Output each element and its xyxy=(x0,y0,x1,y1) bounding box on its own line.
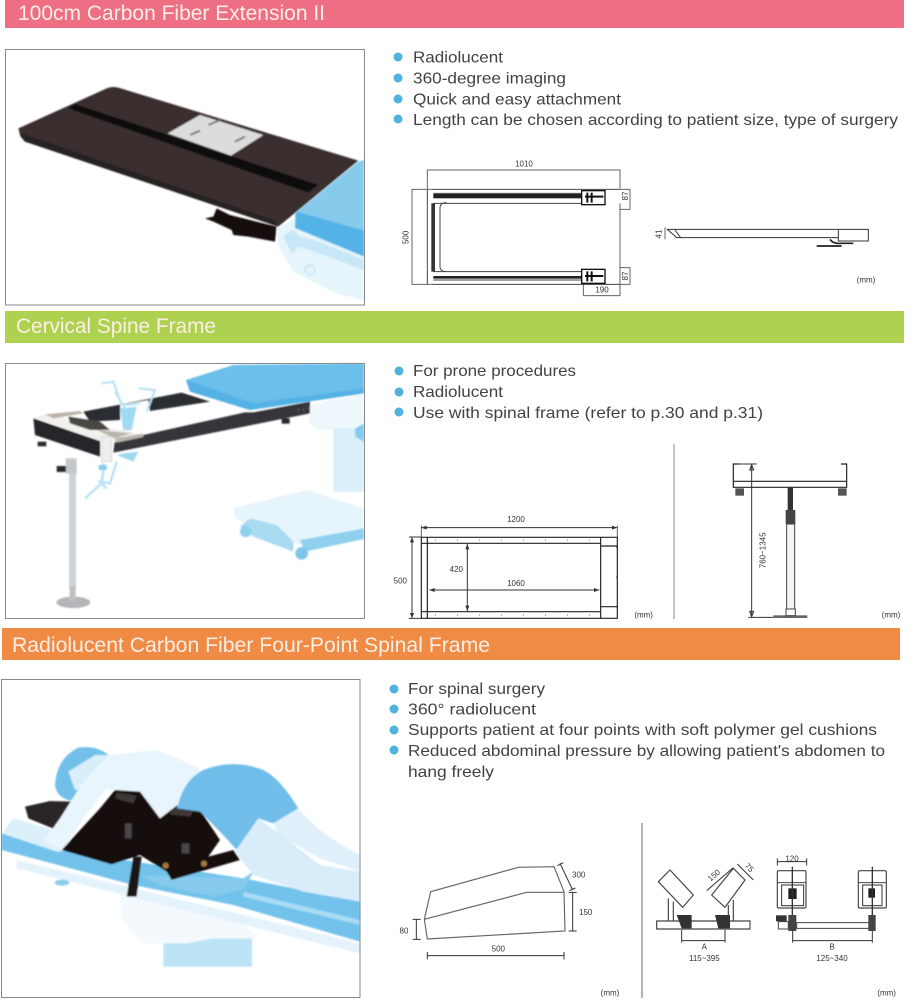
feature list 3 xyxy=(390,681,885,781)
diagram: cervical frame end view: (mm) xyxy=(882,611,901,620)
panel frame 3 xyxy=(2,680,360,998)
diagram: cervical frame top view: 1060 xyxy=(507,579,525,588)
diagram: gel cushion profile: 80 xyxy=(400,926,409,935)
diagram: frame end views xyxy=(657,854,896,998)
feature list 1: Length can be chosen according to patient size, type of surgery xyxy=(413,112,898,129)
feature list 3: Supports patient at four points with soft polymer gel cushions xyxy=(408,722,877,739)
diagram: extension top view: 87 xyxy=(621,271,630,280)
feature list 2: For prone procedures xyxy=(413,363,576,380)
diagram: extension side view: 41 xyxy=(654,229,663,238)
diagram: extension top view: 500 xyxy=(401,230,410,244)
diagram: gel cushion profile: (mm) xyxy=(601,989,620,998)
section header: Radiolucent Carbon Fiber Four-Point Spinal Frame xyxy=(2,628,900,660)
feature list 3: Reduced abdominal pressure by allowing patient's abdomen to xyxy=(408,743,885,760)
diagram: frame end views: (mm) xyxy=(877,989,896,998)
feature list 1: Radiolucent xyxy=(413,50,504,66)
diagram: frame end views: 120 xyxy=(785,854,799,863)
divider line xyxy=(641,823,643,998)
diagram: frame end views: 125~340 xyxy=(816,954,848,963)
diagram: cervical frame end view: 760~1345 xyxy=(758,532,767,568)
diagram: cervical frame top view: (mm) xyxy=(634,611,653,620)
diagram: cervical frame top view xyxy=(394,515,653,620)
diagram: frame end views: 150 xyxy=(706,867,722,883)
diagram: cervical frame top view: 420 xyxy=(450,565,464,574)
panel: cervical spine frame photo xyxy=(33,363,364,608)
feature list 1: Quick and easy attachment xyxy=(413,92,622,108)
diagram: extension top view: 1010 xyxy=(515,160,533,169)
feature list 1: 360-degree imaging xyxy=(413,70,566,88)
diagram: cervical frame top view: 500 xyxy=(394,577,408,586)
diagram: frame end views: B xyxy=(829,943,835,952)
panel: carbon fiber extension photo xyxy=(18,87,364,300)
feature list 3: hang freely xyxy=(408,764,494,781)
diagram: extension top view xyxy=(401,160,630,296)
section header: 100cm Carbon Fiber Extension II: 100cm Carbon Fiber Extension II xyxy=(18,2,325,25)
panel: four-point spinal frame photo xyxy=(2,747,360,967)
diagram: extension side view xyxy=(654,227,876,285)
feature list 2 xyxy=(394,363,763,422)
divider line xyxy=(673,444,675,619)
diagram: cervical frame end view xyxy=(733,464,901,620)
feature list 3: For spinal surgery xyxy=(408,681,545,698)
feature list 2: Radiolucent xyxy=(413,384,504,401)
section header: 100cm Carbon Fiber Extension II xyxy=(5,0,904,28)
section header: Cervical Spine Frame: Cervical Spine Frame xyxy=(16,315,216,338)
diagram: gel cushion profile: 500 xyxy=(492,945,506,954)
feature list 1 xyxy=(394,50,898,129)
diagram: frame end views: 75 xyxy=(743,861,756,874)
section header: Cervical Spine Frame xyxy=(5,311,904,343)
feature list 2: Use with spinal frame (refer to p.30 and p.31) xyxy=(413,405,763,422)
feature list 3: 360° radiolucent xyxy=(408,702,537,718)
diagram: gel cushion profile xyxy=(400,863,620,998)
panel frame 2 xyxy=(6,364,364,618)
diagram: extension top view: 87 xyxy=(621,191,630,200)
section header: Radiolucent Carbon Fiber Four-Point Spinal Frame: Radiolucent Carbon Fiber Four-Point Spinal Frame xyxy=(12,634,490,657)
diagram: extension side view: (mm) xyxy=(857,276,876,285)
diagram: extension top view: 190 xyxy=(595,285,609,294)
diagram: frame end views: 115~395 xyxy=(689,954,720,963)
diagram: cervical frame top view: 1200 xyxy=(507,515,525,524)
diagram: gel cushion profile: 150 xyxy=(579,908,593,917)
diagram: frame end views: A xyxy=(702,943,708,952)
diagram: gel cushion profile: 300 xyxy=(572,871,586,880)
panel frame 1 xyxy=(6,50,364,305)
